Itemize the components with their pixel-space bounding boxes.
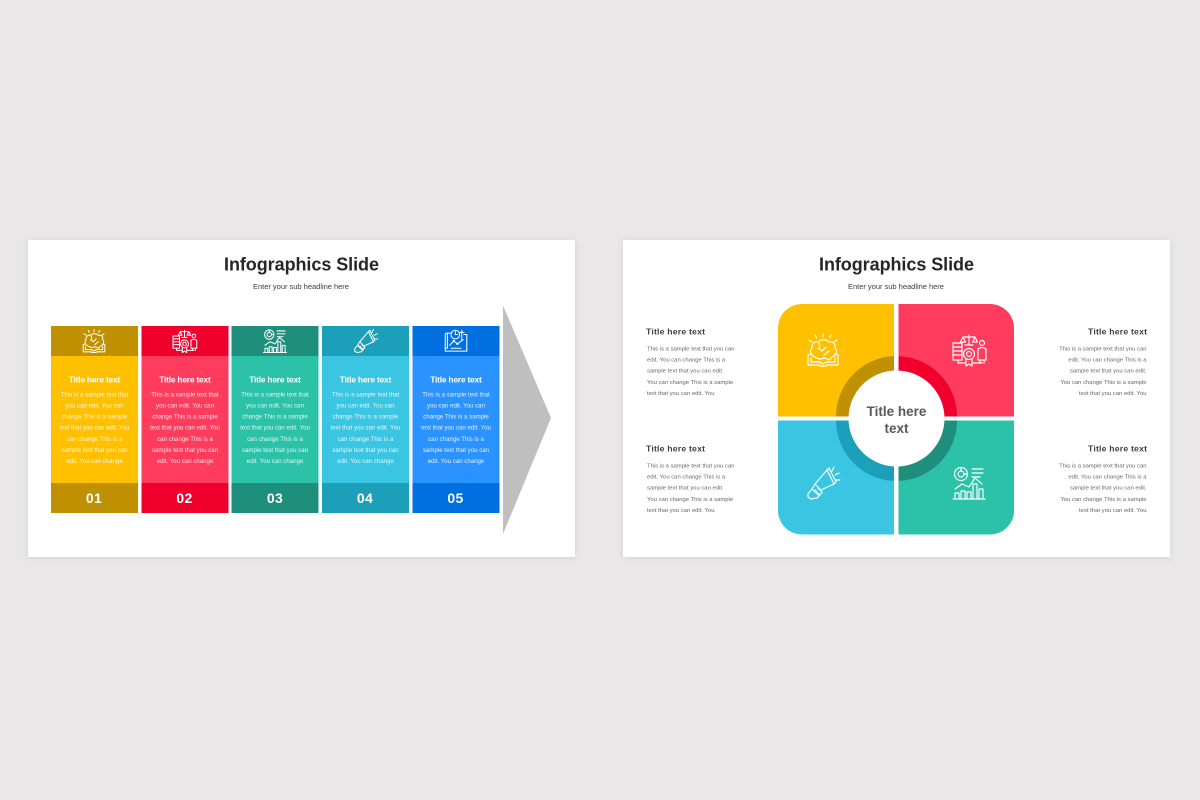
text block: bottom left: You can change This is a sample [647,497,734,503]
text block: bottom left [646,443,734,514]
number: 03 [267,490,283,506]
text block: top right: text that you can edit. You [1079,391,1146,397]
grey arrow [503,306,551,534]
text block: top right: sample text that you can edit. [1070,368,1147,374]
body text: text that you can edit. You [150,425,220,432]
body text: This is a sample text that [422,391,490,398]
text block: bottom left: sample text that you can edit. [647,486,724,492]
body text: This is a sample text that [332,391,400,398]
body text: text that you can edit. You [60,425,129,432]
icon: brain on book [83,330,105,353]
text block: bottom right: text that you can edit. You [1079,508,1146,514]
text block: top right: This is a sample text that you can [1059,346,1146,352]
text block: bottom right: You can change This is a sample [1060,497,1147,503]
icon: brain on book [808,334,838,366]
icon: megaphone [808,467,840,499]
body text: This is a sample text that [61,391,129,398]
number: 04 [357,490,373,506]
body text: you can edit. You can [246,402,304,409]
slide 1 sub headline: Enter your sub headline here [253,282,349,291]
text block: top left: sample text that you can edit. [647,368,724,374]
ring segments [836,356,957,481]
body text: you can edit. You can [427,402,485,409]
body text: text that you can edit. You [421,425,491,432]
body text: sample text that you can [152,447,218,454]
column 04 [322,326,409,513]
icon: charts [953,468,985,499]
text block: top left: Title here text [646,326,705,336]
column 02 [142,326,228,513]
body text: change This is a sample [242,413,308,420]
text block: top right: You can change This is a sample [1060,380,1147,386]
body text: change This is a sample [423,413,489,420]
quadrant: teal [898,420,1014,534]
column 05 [412,326,500,513]
body text [421,391,491,465]
text block: bottom right: This is a sample text that you can [1059,463,1146,469]
body text: edit. You can change [247,458,304,465]
body text: sample text that you can [423,447,489,454]
slide 1: five column arrow process [28,240,575,557]
slide 2: four quadrant diagram [623,240,1170,557]
title: Title here text [340,374,391,384]
body text: can change This is a [247,436,304,443]
center label: text [884,421,909,436]
number: 02 [176,490,193,506]
title: Title here text [430,374,482,384]
body text [60,391,129,465]
title: Title here text [159,374,211,384]
body text: can change This is a [428,436,485,443]
body text: can change This is a [67,436,123,443]
body text: change This is a sample [62,413,128,420]
body text: edit. You can change [66,458,123,465]
text block: bottom right: edit. You can change This is a [1068,474,1147,480]
text block: bottom left: text that you can edit. You [647,508,714,514]
body text: text that you can edit. You [331,425,400,432]
body text [331,391,400,465]
text block: top left: edit. You can change This is a [647,358,726,364]
body text: This is a sample text that [151,391,219,398]
icon: scales, medal and person [953,335,986,366]
body text [150,391,220,465]
text block: top left [646,326,734,397]
slide 2 title: Infographics Slide [819,254,974,274]
body text: can change This is a [157,436,214,443]
text block: top left: text that you can edit. You [647,391,714,397]
text block: bottom left: edit. You can change This is a [647,474,726,480]
icon: megaphone [355,330,378,353]
text block: top right: Title here text [1088,326,1147,336]
text block: bottom right: sample text that you can edit. [1070,486,1147,492]
body text: text that you can edit. You [240,425,310,432]
slide 1 background panel [28,240,575,557]
number: 05 [447,490,464,506]
title: Title here text [69,374,120,384]
body text: change This is a sample [152,413,218,420]
icon: document with clock and graph [445,330,467,351]
slide 1 title: Infographics Slide [224,254,379,274]
quadrant: red [898,304,1014,416]
body text: edit. You can change [337,458,394,465]
quadrant: yellow [778,304,894,416]
icon: scales, medal and person [173,330,197,353]
quadrant: cyan [778,420,894,534]
body text: edit. You can change [157,458,214,465]
body text: edit. You can change [428,458,485,465]
body text [240,391,310,465]
column 01 [51,326,138,513]
slide 2 background panel [623,240,1170,557]
body text: This is a sample text that [241,391,309,398]
number: 01 [86,490,102,506]
center circle [848,370,944,466]
slide 2 sub headline: Enter your sub headline here [848,282,944,291]
body text: sample text that you can [332,447,399,454]
text block: bottom right [1059,443,1147,514]
center label [867,404,927,436]
body text: change This is a sample [333,413,399,420]
text block: top right: edit. You can change This is a [1068,358,1147,364]
text block: top right [1059,326,1147,397]
body text: you can edit. You can [156,402,214,409]
text block: bottom left: This is a sample text that you can [647,463,734,469]
text block: bottom right: Title here text [1088,443,1147,453]
column 03 [232,326,318,513]
body text: you can edit. You can [66,402,123,409]
body text: sample text that you can [242,447,308,454]
text block: top left: You can change This is a sample [647,380,734,386]
body text: sample text that you can [61,447,128,454]
body text: you can edit. You can [337,402,394,409]
body text: can change This is a [338,436,394,443]
text block: top left: This is a sample text that you can [647,346,734,352]
center label: Title here [867,404,927,419]
title: Title here text [249,374,301,384]
text block: bottom left: Title here text [646,443,705,453]
icon: charts [264,330,287,353]
